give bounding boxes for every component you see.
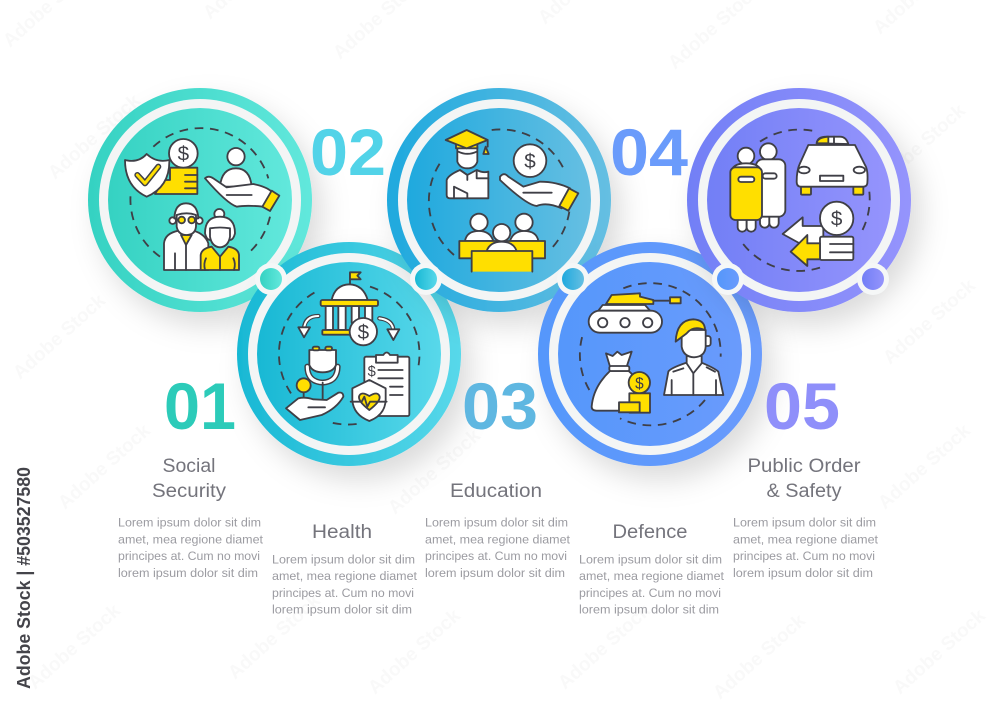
watermark: Adobe Stock	[554, 600, 655, 694]
heading: education: Education	[450, 481, 542, 502]
heading: health: Health	[312, 522, 372, 543]
circle 3: education	[387, 88, 611, 312]
watermark: Adobe Stock	[54, 420, 155, 514]
icon: social security	[125, 128, 279, 270]
icon: public order and safety	[730, 130, 870, 271]
icon: health: $	[368, 364, 376, 380]
text block: public order and safety: amet, mea regione diamet	[733, 532, 879, 546]
icon: education: $	[524, 150, 536, 173]
text block: health: lorem ipsum dolor sit dim	[272, 602, 412, 616]
icon: defence	[580, 283, 723, 425]
watermark: Adobe Stock	[869, 100, 970, 194]
text block: health	[272, 552, 418, 616]
heading: public order and safety: Public Order	[748, 456, 861, 477]
text block: education: amet, mea regione diamet	[425, 532, 571, 546]
text block: social security	[118, 516, 264, 580]
watermark: Adobe Stock	[874, 420, 975, 514]
text block: defence	[579, 552, 725, 616]
icon: public order and safety: $	[831, 208, 843, 231]
text block: education: principes at. Cum no movi	[425, 549, 567, 563]
text block: public order and safety: Lorem ipsum dolor sit dim	[733, 516, 876, 530]
heading: defence: Defence	[612, 522, 688, 543]
watermark: Adobe Stock	[224, 590, 325, 684]
icon: health	[279, 272, 419, 425]
icon: health: $	[358, 321, 370, 344]
number 05: 05	[764, 369, 840, 443]
heading: public order and safety: & Safety	[766, 481, 842, 502]
heading: social security: Social	[162, 456, 216, 477]
text block: defence: amet, mea regione diamet	[579, 569, 725, 583]
circle 5: public order and safety	[687, 88, 911, 312]
watermark: Adobe Stock	[9, 290, 110, 384]
text block: public order and safety: principes at. Cum no movi	[733, 549, 875, 563]
text block: social security: principes at. Cum no movi	[118, 549, 260, 563]
watermark: Adobe Stock	[364, 605, 465, 699]
number 03: 03	[462, 369, 538, 443]
text block: education: Lorem ipsum dolor sit dim	[425, 516, 568, 530]
heading: social security	[152, 456, 227, 502]
watermark: Adobe Stock	[709, 610, 810, 704]
icon: social security: $	[178, 143, 190, 166]
text block: defence: lorem ipsum dolor sit dim	[579, 602, 719, 616]
heading: social security: Security	[152, 481, 227, 502]
circle 1: social security	[88, 88, 312, 312]
text block: defence: principes at. Cum no movi	[579, 586, 721, 600]
icon: education	[429, 129, 578, 272]
watermark: Adobe Stock	[879, 275, 980, 369]
text block: health: Lorem ipsum dolor sit dim	[272, 552, 415, 566]
text block: social security: Lorem ipsum dolor sit dim	[118, 516, 261, 530]
watermark: Adobe Stock	[44, 90, 145, 184]
number 02: 02	[310, 115, 386, 189]
number 04: 04	[610, 115, 688, 189]
text block: health: principes at. Cum no movi	[272, 586, 414, 600]
text block: public order and safety: lorem ipsum dolor sit dim	[733, 566, 873, 580]
number 01: 01	[164, 369, 236, 443]
watermark: Adobe Stock	[889, 605, 990, 699]
text block: education	[425, 516, 571, 580]
text block: defence: Lorem ipsum dolor sit dim	[579, 552, 722, 566]
stock id label: Adobe Stock | #503527580	[13, 467, 34, 689]
text block: social security: amet, mea regione diamet	[118, 532, 264, 546]
icon: defence: $	[635, 375, 644, 392]
circle 2: health	[237, 242, 461, 466]
text block: social security: lorem ipsum dolor sit dim	[118, 566, 258, 580]
text block: public order and safety	[733, 516, 879, 580]
watermark: Adobe Stock	[384, 425, 485, 519]
heading: public order and safety	[748, 456, 861, 502]
text block: education: lorem ipsum dolor sit dim	[425, 566, 565, 580]
watermark: Adobe Stock	[24, 600, 125, 694]
circle 4: defence	[538, 242, 762, 466]
connector dots	[255, 263, 889, 295]
text block: health: amet, mea regione diamet	[272, 569, 418, 583]
